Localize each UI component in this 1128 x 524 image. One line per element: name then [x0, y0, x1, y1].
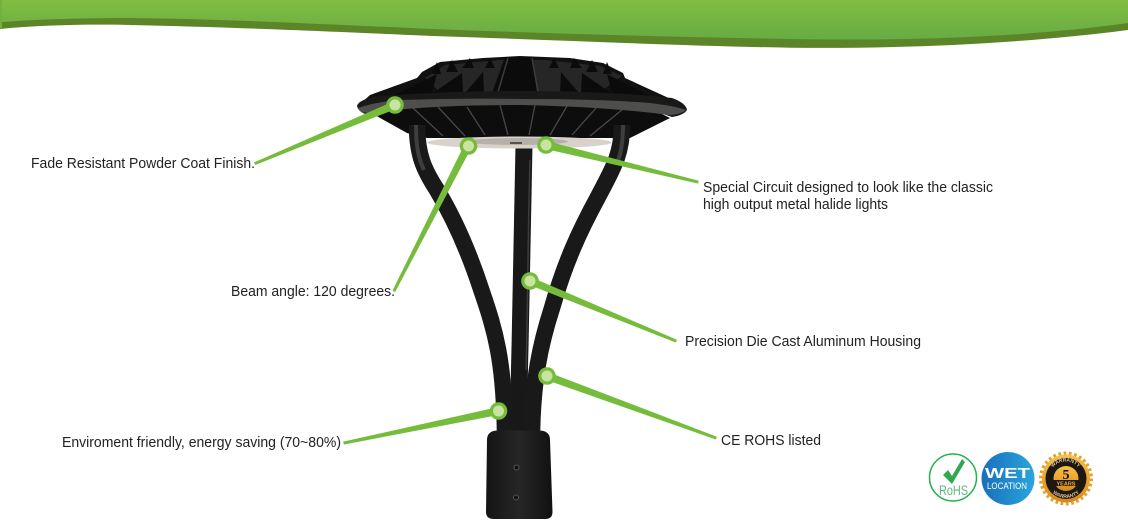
lamp center pole — [518, 145, 530, 432]
badge: wet location: LOCATION — [987, 481, 1027, 491]
callout: environment friendly — [62, 402, 507, 451]
green wave header — [0, 0, 1128, 48]
badge: 5 years warranty — [1039, 452, 1093, 506]
lamp base — [486, 430, 552, 519]
badge: 5 years warranty: YEARS — [1057, 481, 1076, 487]
callout: environment friendly: Enviroment friendly, energy saving (70~80%) — [62, 435, 341, 451]
callout: special circuit: high output metal halide lights — [703, 197, 888, 213]
lamp head upper fins — [360, 56, 685, 112]
street lamp fixture — [357, 56, 687, 519]
callout: special circuit — [537, 136, 993, 213]
badge: wet location — [982, 452, 1034, 505]
callout: die cast housing: Precision Die Cast Aluminum Housing — [685, 334, 921, 350]
callout: fade resistant finish — [31, 96, 404, 172]
callout: beam angle — [231, 137, 477, 300]
callout: beam angle: Beam angle: 120 degrees. — [231, 284, 395, 300]
badge: wet location: WET — [985, 465, 1030, 482]
badge: 5 years warranty: WARRANTY — [1050, 458, 1081, 467]
lamp side arms — [416, 125, 623, 432]
badge: 5 years warranty: 5 — [1062, 468, 1070, 483]
callout: special circuit: Special Circuit designed to look like the classic — [703, 180, 993, 196]
badge: RoHS — [930, 454, 976, 501]
badge: RoHS: RoHS — [939, 482, 968, 498]
callout: CE ROHS — [538, 367, 821, 449]
lamp rim — [357, 91, 687, 117]
badge: 5 years warranty: WARRANTY — [1053, 490, 1078, 498]
lamp head lower fins — [373, 105, 670, 138]
callout: CE ROHS: CE ROHS listed — [721, 433, 821, 449]
callout: die cast housing — [521, 272, 921, 350]
LED panel — [427, 136, 612, 148]
callout: fade resistant finish: Fade Resistant Powder Coat Finish. — [31, 156, 255, 172]
